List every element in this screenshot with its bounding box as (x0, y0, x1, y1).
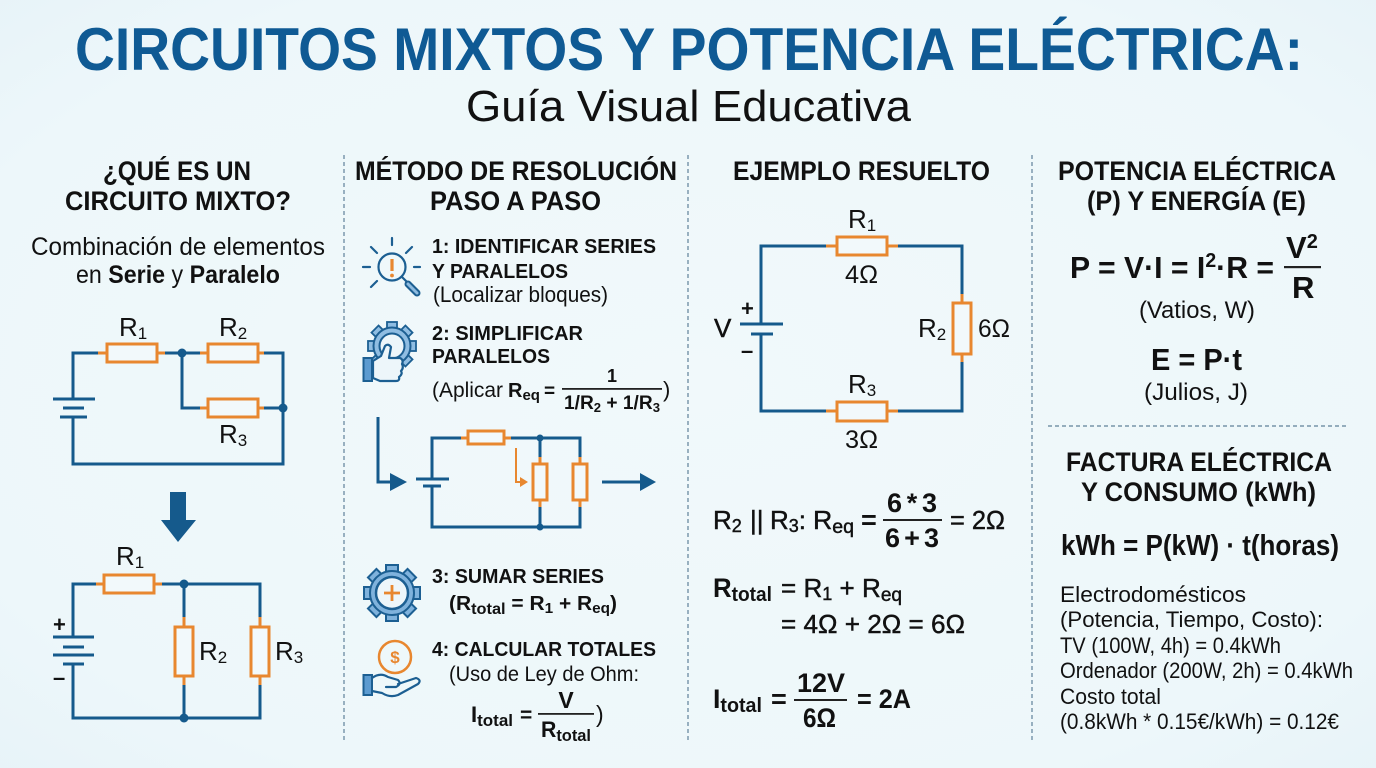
circuit: redrawn parallel diagram (53, 541, 303, 722)
arrow: into circuit (378, 417, 407, 491)
step 3 text: = R (506, 592, 545, 615)
appliance list: Ordenador (200W, 2h) = 0.4kWh (1060, 658, 1353, 683)
formula: power (1070, 230, 1321, 305)
formula: total resistance: eq (881, 585, 902, 606)
appliance list (1060, 582, 1353, 734)
heading: power and energy: (P) Y ENERGÍA (E) (1087, 186, 1306, 216)
formula: equivalent resistance: : (799, 505, 806, 535)
arrow: out of circuit (602, 473, 656, 491)
step 2 text: + 1/R (601, 393, 653, 414)
circuit: example series circuit: R (848, 204, 867, 234)
heading: what is a mixed circuit: CIRCUITO MIXTO? (65, 186, 291, 216)
description text (31, 233, 325, 289)
formula: equivalent resistance: = (861, 505, 877, 535)
title: CIRCUITOS MIXTOS Y POTENCIA ELÉCTRICA: (75, 16, 1303, 83)
circuit: redrawn parallel diagram: 3 (294, 648, 303, 667)
arrow: down (161, 492, 196, 542)
heading: method (355, 156, 677, 216)
formula: energy: E = P·t (1151, 342, 1242, 377)
circuit: example series circuit: 3Ω (845, 426, 878, 454)
step 3 text: 3: SUMAR SERIES (432, 565, 604, 588)
formula: equivalent resistance: R (770, 505, 789, 535)
step 4 text: (Uso de Ley de Ohm: (449, 663, 639, 686)
step 3 text: total (471, 601, 506, 618)
formula: equivalent resistance: R (713, 505, 732, 535)
formula: total current: = 2A (857, 684, 911, 714)
circuit: redrawn parallel diagram: R (275, 636, 294, 666)
formula: total resistance: total (732, 584, 772, 606)
step 1 text (432, 235, 656, 307)
icon: hand with coin (364, 641, 420, 696)
step 3 text: ) (610, 592, 617, 615)
step 4 text: ) (596, 701, 604, 727)
formula: power: 2 (1307, 231, 1318, 253)
heading: bill and consumption: Y CONSUMO (kWh) (1081, 477, 1316, 507)
formula: total current (713, 668, 911, 733)
icon: gear with plus (364, 565, 420, 621)
formula: equivalent resistance: 6+3 (885, 523, 939, 553)
formula: equivalent resistance: 3 (789, 516, 799, 536)
step 3 text: + R (553, 592, 592, 615)
circuit: redrawn parallel diagram: R (116, 541, 135, 571)
step 4 text: 4: CALCULAR TOTALES (432, 638, 656, 661)
step 2 text (432, 322, 670, 415)
step 4 text: = (520, 704, 532, 727)
step 2 text: ) (663, 377, 670, 402)
circuit: mixed circuit diagram: R (219, 419, 238, 449)
circuit: redrawn parallel diagram: R (199, 636, 218, 666)
formula: equivalent resistance: 2 (732, 516, 742, 536)
panel: step by step method (355, 156, 677, 745)
circuit: mixed circuit diagram: 1 (138, 324, 147, 343)
heading: bill and consumption (1066, 447, 1332, 507)
formula: total resistance: = 4Ω + 2Ω = 6Ω (781, 609, 965, 639)
formula: total current: total (720, 695, 762, 717)
formula: total current: I (713, 684, 721, 714)
icon: gear with thumbs up (364, 322, 416, 381)
formula: equivalent resistance (713, 488, 1005, 553)
formula: power: 2 (1205, 250, 1216, 272)
formula: total resistance: + R (832, 573, 881, 603)
formula: total resistance: 1 (822, 584, 832, 604)
appliance list: Electrodomésticos (1060, 582, 1246, 607)
step 1 text: (Localizar bloques) (433, 282, 608, 307)
formula: power: R (1292, 270, 1314, 305)
step 2 text: 2 (594, 400, 601, 415)
circuit: redrawn parallel diagram: 2 (218, 648, 227, 667)
appliance list: (Potencia, Tiempo, Costo): (1060, 607, 1323, 632)
step 2 text: R (508, 380, 522, 402)
circuit: mixed circuit diagram: 2 (238, 324, 247, 343)
step 2 text: 1/R (564, 393, 594, 414)
heading: bill and consumption: FACTURA ELÉCTRICA (1066, 447, 1332, 477)
heading: method: MÉTODO DE RESOLUCIÓN (355, 156, 677, 186)
circuit: mixed circuit diagram: R (119, 312, 138, 342)
formula: total resistance: = R (781, 573, 822, 603)
circuit: example series circuit: 2 (937, 325, 946, 344)
circuit: redrawn parallel diagram: + (53, 612, 66, 637)
circuit: example series circuit: – (741, 338, 753, 363)
step 1 text: Y PARALELOS (432, 260, 568, 283)
formula: total resistance: R (713, 573, 732, 603)
panel: what is a mixed circuit (31, 156, 325, 722)
formula: equivalent resistance: || (750, 505, 764, 535)
heading: what is a mixed circuit: ¿QUÉ ES UN (103, 156, 251, 186)
circuit: mixed circuit diagram: R (219, 312, 238, 342)
panel: electric power and energy (1058, 156, 1336, 406)
step 2 text: PARALELOS (432, 345, 550, 368)
step 3 text: 1 (545, 600, 553, 617)
step 2 text: 2: SIMPLIFICAR (432, 322, 583, 345)
icon: hand with coin: $ (390, 648, 400, 667)
heading: method: PASO A PASO (430, 186, 601, 216)
circuit: example series circuit: 6Ω (978, 315, 1010, 343)
circuit: example series circuit: V (714, 313, 732, 343)
step 2 text: eq (522, 387, 540, 404)
step 2 text: 1 (607, 366, 617, 386)
formula: equivalent resistance: = 2Ω (950, 505, 1005, 535)
step 4 text: R (541, 717, 557, 742)
appliance list: (0.8kWh * 0.15€/kWh) = 0.12€ (1060, 709, 1339, 734)
icon: magnifier with alert (363, 238, 420, 293)
heading: power and energy (1058, 156, 1336, 216)
circuit: simplified parallel (416, 431, 587, 530)
formula: equivalent resistance: eq (832, 517, 854, 538)
formula: total current: = (771, 684, 787, 714)
step 3 text (432, 565, 617, 618)
circuit: example series circuit: 3 (867, 381, 876, 400)
step 4 text: total (477, 711, 513, 730)
formula: power: P = V·I = I (1070, 250, 1209, 285)
step 4 text: V (558, 687, 574, 713)
circuit: example series circuit (714, 204, 1010, 454)
circuit: mixed circuit diagram: 3 (238, 431, 247, 450)
formula: equivalent resistance: 6*3 (887, 488, 937, 518)
circuit: example series circuit: R (848, 369, 867, 399)
circuit: example series circuit: 1 (867, 216, 876, 235)
circuit: redrawn parallel diagram: – (53, 665, 65, 690)
heading: power and energy: POTENCIA ELÉCTRICA (1058, 156, 1336, 186)
appliance list: Costo total (1060, 684, 1161, 709)
circuit: example series circuit: R (918, 313, 937, 343)
heading: worked example: EJEMPLO RESUELTO (733, 156, 990, 186)
step 4 text: I (471, 702, 477, 727)
formula: power: ·R = (1216, 250, 1274, 285)
description text: en Serie y Paralelo (76, 261, 280, 289)
step 2 text: 3 (653, 400, 660, 415)
panel: electric bill and consumption (1060, 447, 1353, 734)
formula: total current: 12V (797, 668, 845, 698)
circuit: example series circuit: 4Ω (845, 261, 878, 289)
panel: worked example (713, 156, 1010, 733)
circuit: mixed circuit diagram (53, 312, 288, 464)
circuit: redrawn parallel diagram: 1 (135, 553, 144, 572)
step 3 text: (R (449, 592, 471, 615)
unit: joules: (Julios, J) (1144, 379, 1248, 406)
step 2 text: (Aplicar (432, 379, 503, 402)
step 1 text: 1: IDENTIFICAR SERIES (432, 235, 656, 258)
step 4 text (432, 638, 656, 745)
unit: watts: (Vatios, W) (1139, 297, 1255, 324)
formula: power: V (1286, 230, 1307, 265)
subtitle: Guía Visual Educativa (466, 82, 912, 131)
heading: what is a mixed circuit (65, 156, 291, 216)
circuit: example series circuit: + (741, 296, 754, 321)
step 4 text: total (556, 726, 591, 745)
arrow: highlight on resistor (516, 448, 528, 487)
appliance list: TV (100W, 4h) = 0.4kWh (1060, 633, 1281, 658)
formula: total current: 6Ω (803, 703, 836, 733)
description text: Combinación de elementos (31, 233, 325, 261)
step 2 text: = (544, 381, 555, 402)
formula: kWh: kWh = P(kW) · t(horas) (1061, 530, 1339, 562)
formula: equivalent resistance: R (813, 505, 832, 535)
step 3 text: eq (592, 600, 610, 617)
formula: total resistance (713, 573, 965, 639)
